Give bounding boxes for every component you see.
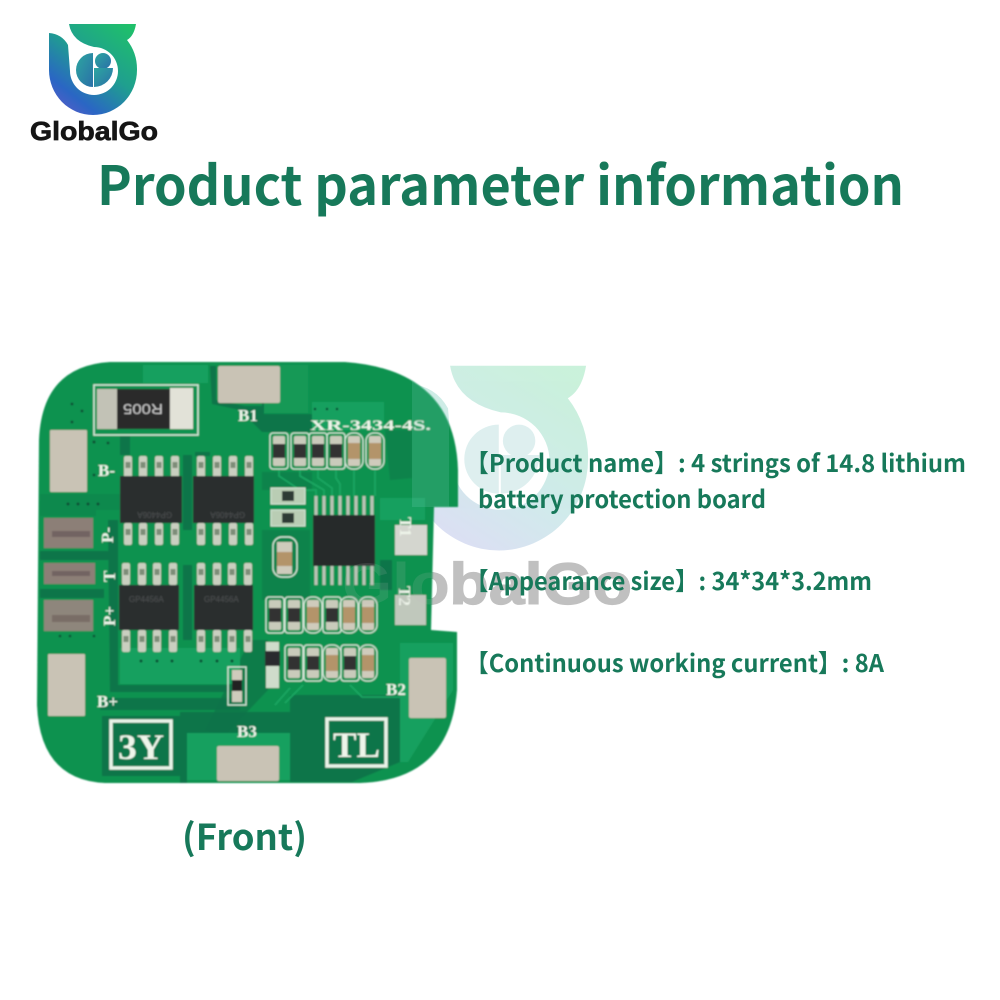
solder pad B3 <box>217 746 279 781</box>
spec: product name: battery protection board <box>478 481 766 516</box>
tall capacitor <box>273 537 297 577</box>
shunt resistor R005 <box>94 385 198 435</box>
watermark logo behind text <box>342 366 632 617</box>
MOSFET chip bottom left <box>119 563 179 652</box>
logo: GlobalGo <box>30 24 158 146</box>
silkscreen labels: B1 <box>238 406 258 425</box>
dark copper channels <box>40 366 412 783</box>
lighter copper pads <box>120 365 453 780</box>
silkscreen labels: B- <box>98 461 115 480</box>
spec: appearance size: 【Appearance size】: 34*34*3.2mm <box>465 563 872 598</box>
vias <box>59 403 338 662</box>
silkscreen labels: B+ <box>97 692 118 711</box>
watermark overlay on board <box>412 380 449 507</box>
small diode <box>228 667 246 705</box>
MOSFET chip top right: GP4406A <box>210 510 245 519</box>
top row of SMD parts <box>270 433 384 469</box>
circuit board photo <box>37 362 458 783</box>
silkscreen labels <box>97 406 431 741</box>
MOSFET chip top right <box>193 456 254 545</box>
middle SMD row <box>266 597 377 633</box>
silkscreen label TL: TL <box>333 725 380 765</box>
silkscreen labels: B2 <box>386 680 406 699</box>
silkscreen label 3Y: 3Y <box>118 727 164 767</box>
silkscreen labels: P- <box>98 527 117 543</box>
solder pad B+ <box>48 654 85 716</box>
silkscreen labels: T1 <box>396 517 415 537</box>
MOSFET chip top left <box>120 456 182 545</box>
watermark brand: GlobalGo <box>342 552 632 617</box>
silkscreen labels: T2 <box>395 586 414 606</box>
spec: product name <box>465 445 966 516</box>
solder pad T2 <box>395 595 426 625</box>
board outline <box>37 362 458 783</box>
solder pad B- <box>50 430 87 492</box>
protection IC <box>313 496 375 585</box>
solder pad B1 <box>218 366 280 403</box>
spec: continuous working current: 【Continuous working current】: 8A <box>465 645 884 680</box>
silkscreen label TL <box>327 719 386 766</box>
small SMD pair <box>271 488 305 526</box>
MOSFET chip bottom right <box>194 563 253 652</box>
silkscreen labels: XR-3434-4S. <box>310 418 431 434</box>
MOSFET chip bottom left: GP4456A <box>129 595 164 604</box>
silkscreen labels: B3 <box>237 722 257 741</box>
MOSFET chip top left: GP4406A <box>137 510 172 519</box>
silkscreen label 3Y <box>111 721 171 768</box>
spec: product name: 【Product name】: 4 strings of 14.8 lithium <box>465 445 966 480</box>
shunt resistor R005: R005 <box>123 400 163 417</box>
MOSFET chip bottom right: GP4456A <box>204 595 239 604</box>
icon: GlobalGo mark <box>49 24 137 115</box>
watermark text overlay on board: GlobalGo <box>342 552 632 617</box>
solder pad P- <box>44 518 93 548</box>
solder pad B2 <box>409 658 446 718</box>
brand name: GlobalGo <box>30 116 158 146</box>
title: Product parameter information <box>97 142 904 221</box>
caption: front: (Front) <box>182 809 307 861</box>
solder pad T1 <box>395 525 427 555</box>
silkscreen labels: T <box>100 570 119 582</box>
circuit traces <box>275 470 400 705</box>
specification text block <box>465 445 966 680</box>
solder pad P+ <box>44 600 93 631</box>
lower SMD row <box>285 645 377 681</box>
silkscreen labels: P+ <box>100 606 119 626</box>
small transistor <box>265 642 280 688</box>
solder pad T <box>44 563 95 584</box>
